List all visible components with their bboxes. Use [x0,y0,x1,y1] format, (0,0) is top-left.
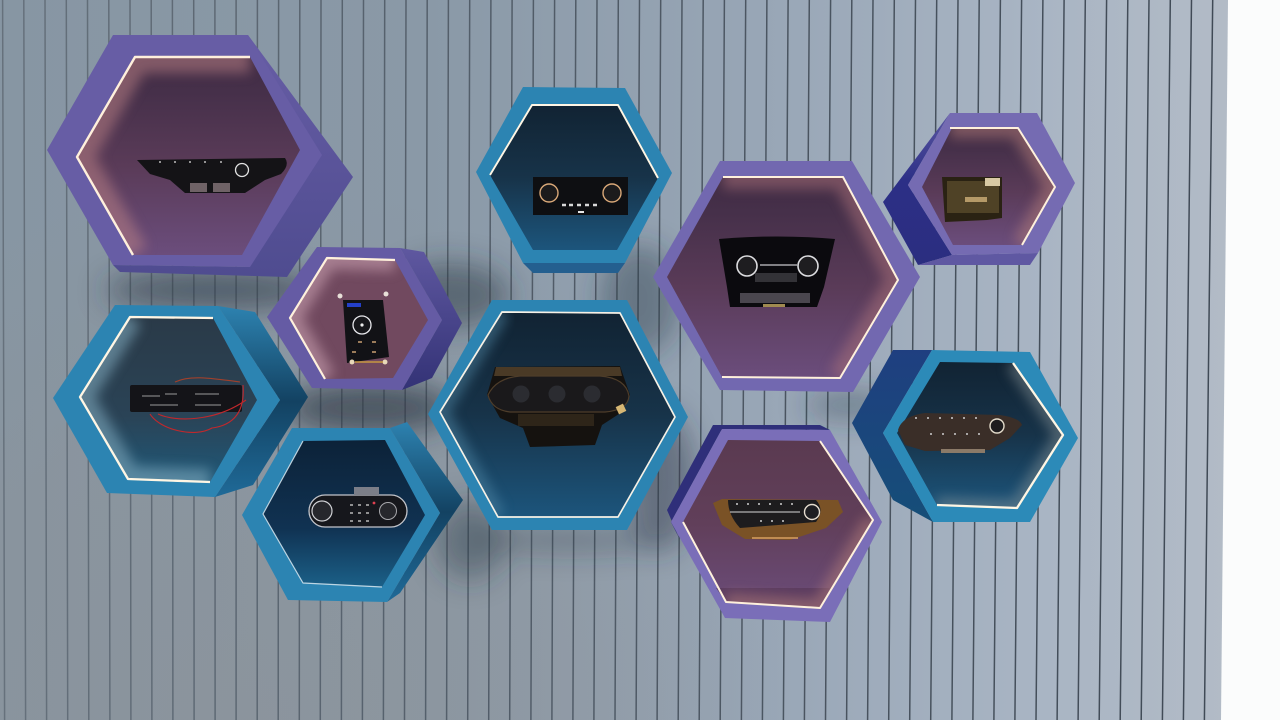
light strip [490,105,658,178]
light strip [440,312,675,517]
device: control module [942,177,1002,222]
panel: large purple hexagon, top left [47,35,353,277]
device: touch climate panel [719,236,835,307]
device: radio panel [137,158,287,193]
panel: small purple hexagon, centre left [267,247,462,390]
light strip [683,441,873,608]
panel: small purple hexagon, top right [883,113,1075,265]
panel: blue hexagon, right [852,350,1078,522]
device: oval climate control [309,487,407,527]
light strip [263,441,382,587]
light strip [290,258,395,379]
light strip [950,128,1055,245]
light strip [937,363,1063,508]
panel: large blue hexagon, centre [428,300,688,530]
panel: purple hexagon, bottom centre [667,425,882,622]
soft shadows cast on wall [105,245,895,580]
light strip [722,177,898,378]
light strip [80,317,213,482]
light strip [77,57,250,255]
device: three-knob climate control [487,366,630,447]
panel: blue hexagon, top centre [476,87,672,273]
panel: blue hexagon, bottom left [242,422,463,602]
device: panel with red wiring [130,378,246,432]
panel: blue hexagon, mid left [53,305,308,497]
device: climate control [533,177,628,215]
device: slim radio panel [898,413,1022,453]
device: radio panel with brass trim [713,499,843,540]
device: vertical touch control [338,292,389,364]
panel: large purple hexagon, centre right [653,161,920,392]
